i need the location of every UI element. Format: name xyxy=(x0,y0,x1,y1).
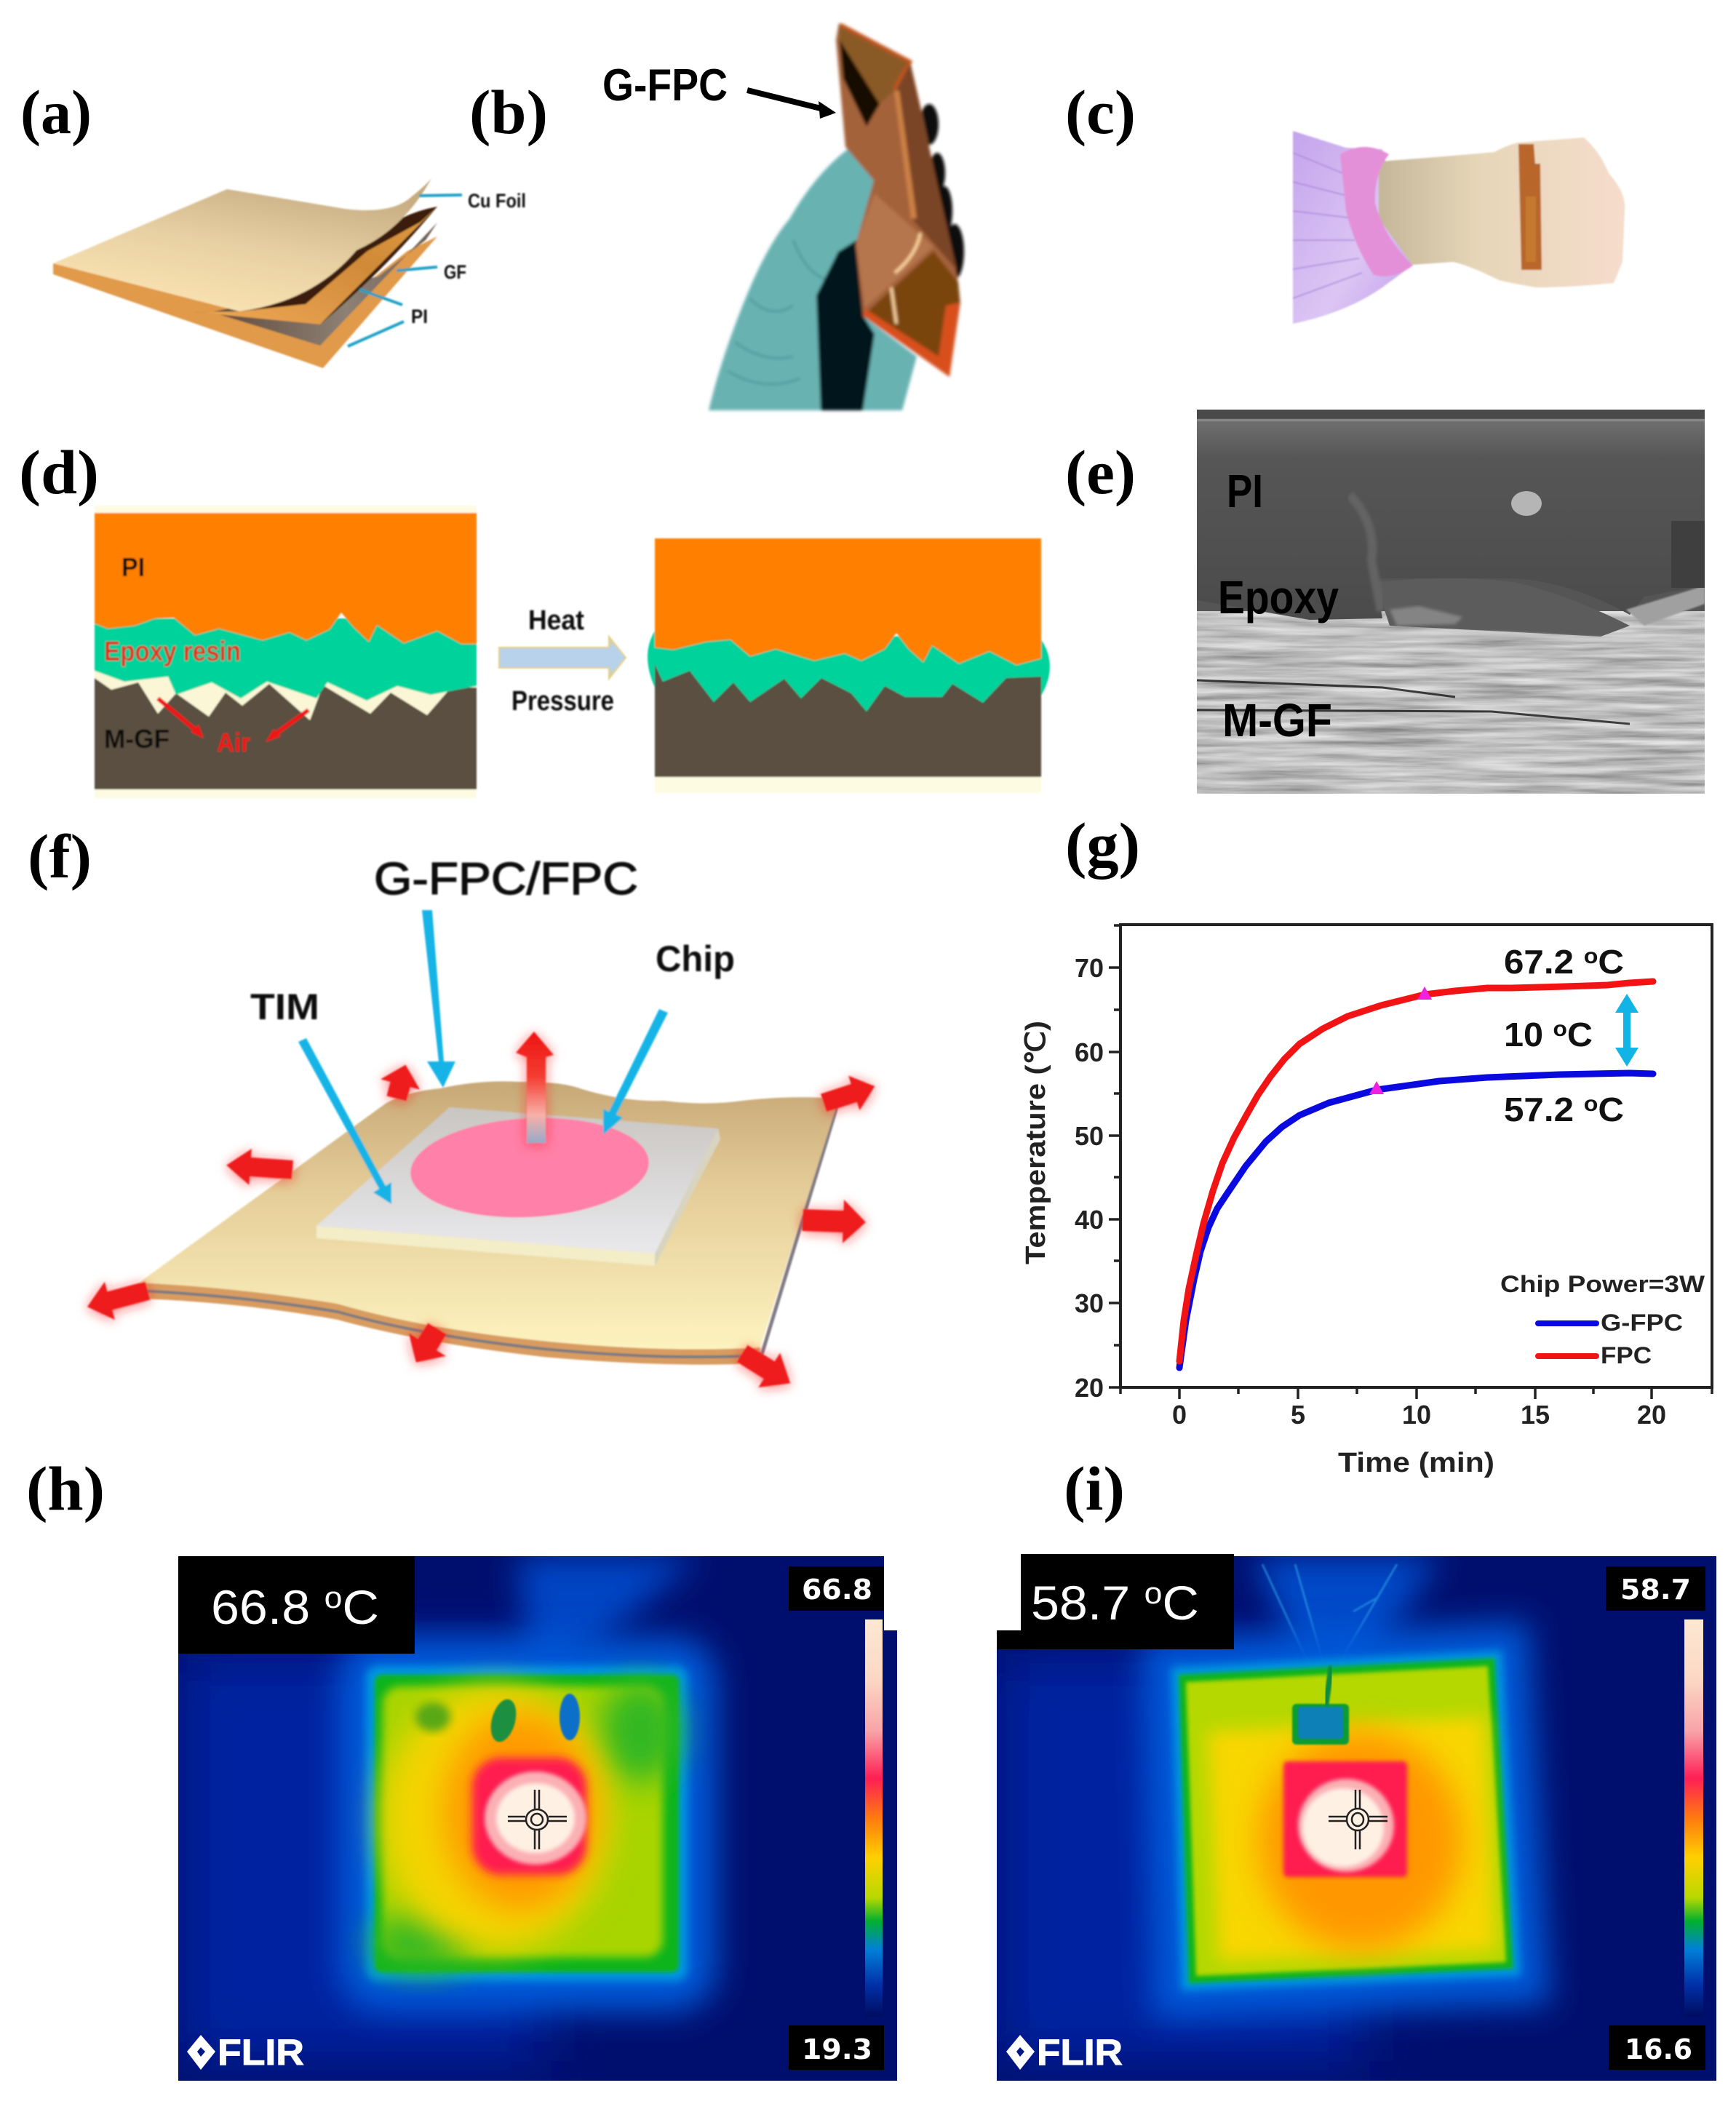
light blue halo xyxy=(366,1666,688,1981)
label: 58.7 C readout xyxy=(997,1554,1234,1649)
top heat plume xyxy=(517,1556,698,1681)
steady-state markers xyxy=(1369,987,1432,1094)
y axis title: Temperature (℃) xyxy=(1021,1021,1051,1264)
labels: G-FPC/FPC xyxy=(374,854,638,904)
M-GF dark layer xyxy=(655,664,1041,777)
lower foil xyxy=(863,251,960,377)
label: 66.8 C readout: o xyxy=(324,1580,342,1614)
top dark band xyxy=(1197,410,1705,419)
epoxy resin layer xyxy=(95,618,477,701)
panel: (i) thermal image of G-FPC xyxy=(997,1556,1716,2081)
scale: thermal colour bar (i): 58.7 xyxy=(1620,1574,1691,1606)
y tick labels: 50 xyxy=(1075,1121,1104,1151)
x tick labels: 0 xyxy=(1172,1400,1187,1430)
glove folds xyxy=(728,240,829,384)
upper PI orange strip xyxy=(195,207,437,324)
annotation: 10 C: 10 xyxy=(1504,1016,1541,1053)
foil highlights xyxy=(891,233,920,324)
label: 58.7 C readout: o xyxy=(1144,1576,1162,1610)
red air arrows xyxy=(158,698,308,742)
layer labels: Cu Foil xyxy=(468,190,526,212)
panel label: (b): (b) xyxy=(469,77,548,147)
labels: PI xyxy=(122,552,145,582)
y tick labels: 30 xyxy=(1075,1288,1104,1318)
red chip region xyxy=(1283,1761,1407,1877)
x tick labels: 15 xyxy=(1521,1400,1550,1430)
vertical heat arrow xyxy=(516,1032,554,1143)
pink ring xyxy=(485,1772,586,1865)
black fingers behind film xyxy=(920,104,964,279)
legend: Chip Power=3W xyxy=(1500,1271,1705,1297)
cutout holes xyxy=(487,1697,520,1745)
crosshair xyxy=(1329,1790,1387,1849)
green board xyxy=(375,1675,679,1972)
panel: (h) thermal image of FPC xyxy=(178,1556,897,2081)
layer labels xyxy=(411,190,526,327)
teal glove xyxy=(709,144,917,410)
green corner bottom xyxy=(371,1913,473,1972)
cutout window xyxy=(1292,1704,1349,1745)
x tick labels: 10 xyxy=(1402,1400,1431,1430)
top Cu foil sheet xyxy=(53,178,431,311)
halo bands xyxy=(95,506,477,514)
logo: FLIR (i) xyxy=(1006,2032,1123,2073)
panel: (d) interface schematic before pressing: M-GF xyxy=(104,724,170,754)
panel label: (c): (c) xyxy=(1065,77,1136,147)
SEM labels: M-GF xyxy=(1222,694,1332,746)
light fold band xyxy=(894,91,917,218)
lower halo xyxy=(95,788,477,798)
G-FPC curve xyxy=(1179,1073,1653,1368)
panel label: (f): (f) xyxy=(28,821,92,891)
sleeve stripes xyxy=(1293,153,1362,298)
panel label: (h): (h) xyxy=(26,1454,105,1523)
light blue halo xyxy=(1171,1651,1521,1991)
annotation: 57.2 C: C xyxy=(1598,1091,1624,1128)
PI orange layer xyxy=(95,513,477,644)
right light flake xyxy=(1626,586,1705,626)
SEM labels xyxy=(1218,465,1339,746)
x tick labels: 20 xyxy=(1637,1400,1666,1430)
arrow: G-FPC pointer xyxy=(747,90,836,119)
y tick labels: 40 xyxy=(1075,1205,1104,1235)
navy background xyxy=(178,1556,897,2081)
top lighter edge xyxy=(1197,419,1705,421)
epoxy layer bulging at sides xyxy=(648,631,1050,717)
pink elastic cuff xyxy=(1340,147,1413,276)
window blue core xyxy=(1298,1707,1343,1739)
y tick labels xyxy=(1075,953,1104,1403)
red foil edge xyxy=(863,303,960,377)
left-blue tone xyxy=(178,1654,542,2061)
wire trace green xyxy=(1326,1666,1331,1706)
copper film main xyxy=(836,23,960,377)
streak lines xyxy=(1197,680,1630,724)
annotation: 67.2 C: o xyxy=(1584,944,1598,968)
PI orange layer xyxy=(655,538,1041,665)
red chip region xyxy=(472,1758,586,1875)
base grey xyxy=(1197,578,1705,611)
FPC curve xyxy=(1179,981,1653,1361)
cyan leader arrows xyxy=(298,910,668,1204)
sheet edge layers xyxy=(139,1283,760,1365)
scale: thermal colour bar (h): 66.8 xyxy=(802,1574,872,1606)
fibrous M-GF texture xyxy=(1197,611,1705,794)
TIM side xyxy=(316,1226,655,1266)
annotation: 10 C: o xyxy=(1553,1017,1567,1041)
yellow interior xyxy=(382,1688,608,1950)
label: 58.7 C readout: 58.7 xyxy=(1031,1576,1124,1630)
bright ridge along interface xyxy=(1197,617,1705,640)
panel: (d) interface schematic after pressing xyxy=(648,538,1050,793)
arrow: heat and pressure process: Pressure xyxy=(511,686,614,717)
GF layer xyxy=(212,223,437,346)
green board xyxy=(1179,1658,1513,1983)
annotation: 67.2 C: C xyxy=(1598,943,1624,981)
flexible circuit strip xyxy=(1518,144,1542,270)
panel: (f) heat spreading schematic: TIM xyxy=(250,987,319,1027)
arrow: heat and pressure process xyxy=(499,605,626,717)
white center xyxy=(1302,1788,1384,1867)
annotation: 10 C: C xyxy=(1567,1016,1593,1053)
film top flap xyxy=(839,23,910,104)
dark pit right xyxy=(1671,521,1705,588)
pink ring xyxy=(1298,1779,1394,1872)
scale: thermal colour bar (h) xyxy=(789,1566,884,2070)
annotation: 57.2 C: 57.2 xyxy=(1504,1091,1569,1128)
panel label: (i): (i) xyxy=(1064,1454,1125,1523)
arrow: temperature difference xyxy=(1615,994,1639,1067)
dark shadow of palm xyxy=(816,239,875,410)
label: 66.8 C readout: 66.8 xyxy=(211,1580,304,1634)
lower light panel xyxy=(856,194,933,308)
right panel of film xyxy=(897,63,957,270)
orange core xyxy=(1259,1732,1462,1950)
navy background xyxy=(997,1556,1716,2081)
blue glow xyxy=(338,1637,717,2012)
green corner top right xyxy=(600,1681,680,1782)
layer labels: PI xyxy=(411,306,428,327)
x axis title: Time (min) xyxy=(1338,1448,1494,1478)
yellow-green interior xyxy=(383,1686,663,1957)
chart: temperature vs time line chart xyxy=(1021,925,1712,1478)
panel label: (g): (g) xyxy=(1065,810,1140,880)
left-blue tone xyxy=(997,1654,1361,2061)
lateral red arrows xyxy=(82,1059,880,1400)
yellow interior xyxy=(1208,1717,1495,1961)
x tick labels: 5 xyxy=(1291,1400,1305,1430)
panel: (e) SEM cross-section image xyxy=(1197,410,1705,794)
scale: thermal colour bar (i): 16.6 xyxy=(1625,2033,1692,2065)
pointer arrows xyxy=(348,195,462,346)
axis ticks xyxy=(1109,925,1712,1399)
panel: (a) layered G-FPC stack diagram xyxy=(53,178,526,368)
flexible sheet xyxy=(139,1081,839,1350)
panel: (d) interface schematic before pressing: Epoxy resin xyxy=(104,637,241,667)
panel: (d) interface schematic before pressing xyxy=(95,506,477,798)
panel label: (a): (a) xyxy=(20,77,92,147)
label: 66.8 C readout: C xyxy=(342,1580,379,1634)
legend: FPC xyxy=(1601,1342,1652,1368)
legend: G-FPC xyxy=(1601,1310,1683,1336)
scale: thermal colour bar (h): 19.3 xyxy=(802,2033,872,2065)
panel: (f) heat spreading schematic xyxy=(82,854,880,1400)
panel label: (e): (e) xyxy=(1065,437,1136,507)
plot frame xyxy=(1120,925,1712,1387)
logo: FLIR (h): FLIR xyxy=(218,2032,304,2073)
layer labels: GF xyxy=(444,261,466,283)
wire plume xyxy=(1251,1556,1441,1666)
heading: G-FPC callout: G-FPC xyxy=(602,60,728,111)
yellow-green interior xyxy=(1186,1666,1506,1976)
crosshair xyxy=(508,1790,567,1849)
y tick labels: 60 xyxy=(1075,1037,1104,1067)
label: 66.8 C readout xyxy=(178,1556,415,1654)
chip disc xyxy=(408,1112,651,1223)
panel label: (d): (d) xyxy=(19,437,99,507)
white center xyxy=(496,1783,575,1853)
wires xyxy=(1262,1564,1397,1702)
granular epoxy xyxy=(1385,611,1630,637)
sheet middle gray line xyxy=(139,1291,760,1357)
purple sleeve xyxy=(1293,131,1412,324)
cream halo xyxy=(655,777,1041,793)
scale: thermal colour bar (i) xyxy=(1606,1566,1705,2070)
annotation: 57.2 C: o xyxy=(1584,1092,1598,1116)
y tick labels: 70 xyxy=(1075,953,1104,983)
y tick labels: 20 xyxy=(1075,1373,1104,1403)
orange core xyxy=(444,1713,597,1910)
film top edge xyxy=(840,25,910,89)
label: 58.7 C readout: C xyxy=(1162,1576,1199,1630)
upper PI dark underside xyxy=(195,207,437,324)
ridge left xyxy=(1350,495,1381,611)
bright epoxy fracture xyxy=(1390,606,1462,626)
logo: FLIR (h) xyxy=(187,2032,304,2073)
TIM square xyxy=(316,1107,718,1254)
annotation: 67.2 C: 67.2 xyxy=(1504,943,1569,981)
arrow: heat and pressure process: Heat xyxy=(528,605,584,636)
panel: (d) interface schematic before pressing: Air xyxy=(217,728,250,757)
logo: FLIR (i): FLIR xyxy=(1037,2032,1123,2073)
strip traces xyxy=(1526,196,1536,262)
panel: (c) wrist photo with flexible strip xyxy=(1293,131,1625,324)
panel: (f) heat spreading schematic: Chip xyxy=(656,939,735,979)
white particle xyxy=(1511,491,1542,516)
panel: (b) photo of gloved hand holding copper film xyxy=(709,23,964,410)
M-GF dark layer xyxy=(95,678,477,789)
legend xyxy=(1500,1271,1705,1368)
SEM labels: Epoxy xyxy=(1218,571,1339,623)
bottom PI layer xyxy=(53,236,437,368)
dark window in film xyxy=(840,40,880,127)
sheet right edge xyxy=(762,1100,839,1355)
x tick labels xyxy=(1172,1400,1666,1430)
blue glow xyxy=(1142,1622,1550,2019)
air cream base xyxy=(95,626,477,728)
SEM labels: PI xyxy=(1227,465,1263,517)
PI upper region xyxy=(1197,418,1705,620)
arm and fist xyxy=(1379,138,1625,287)
